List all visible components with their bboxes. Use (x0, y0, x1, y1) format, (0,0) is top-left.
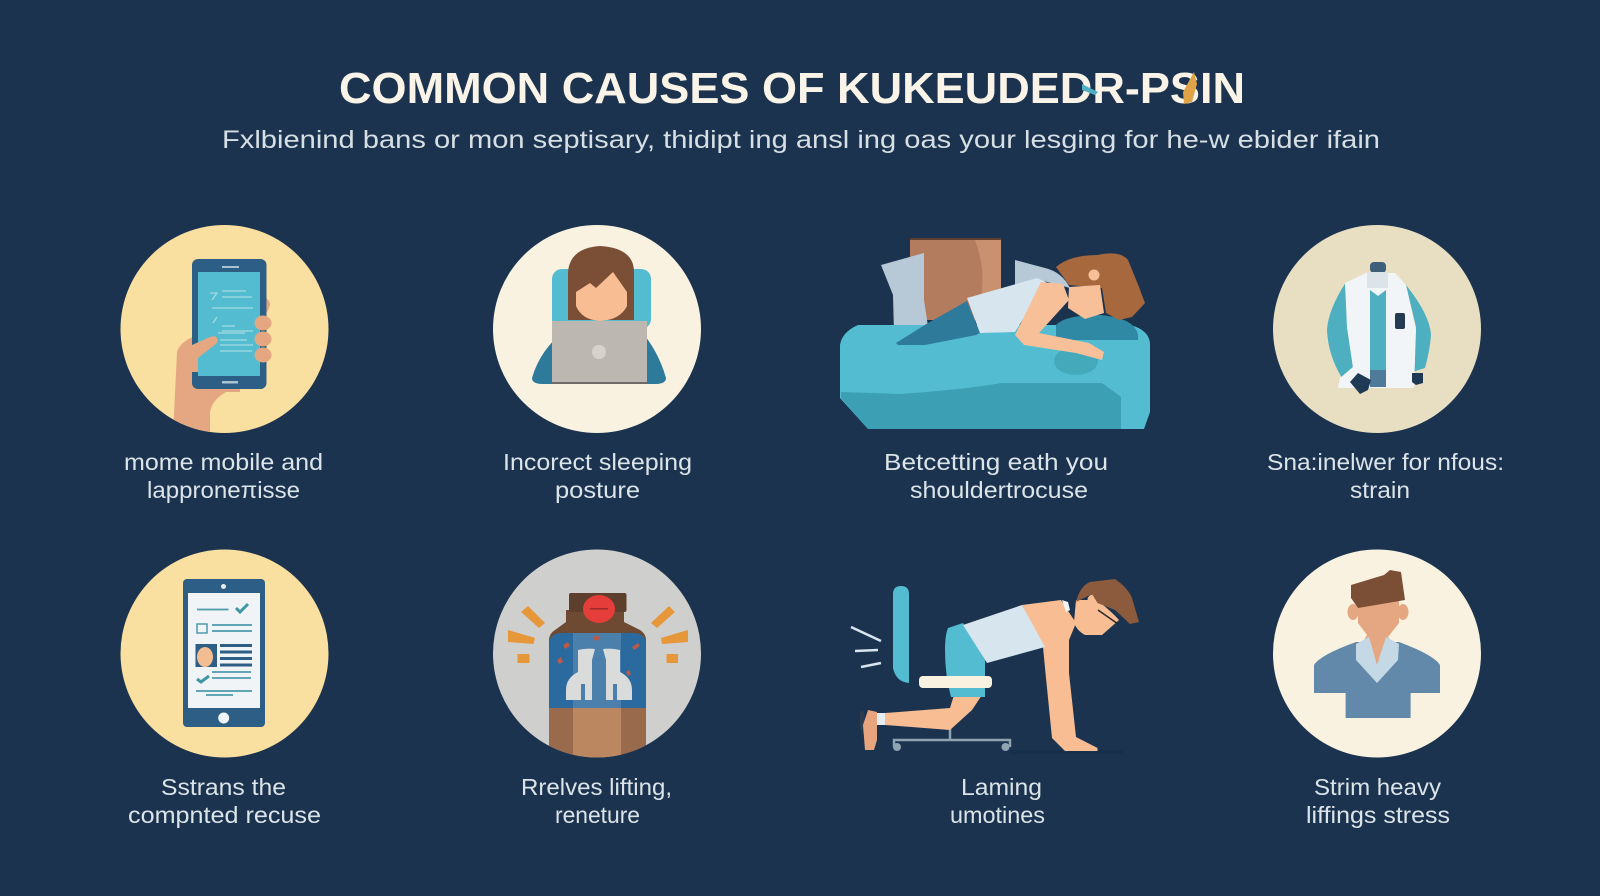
label: umotines (950, 802, 1045, 828)
label: liffings stress (1306, 802, 1450, 828)
panel: phone use (120, 225, 328, 503)
panel: lifting (493, 550, 701, 828)
label (503, 449, 692, 503)
panel: tablet use (120, 550, 328, 828)
label: Sna:inelwer for nfous: (1267, 449, 1504, 475)
label: Sstrans the (161, 774, 286, 800)
icon: tablet with checklist (120, 550, 328, 758)
label (124, 449, 323, 503)
label: Incorect sleeping (503, 449, 692, 475)
label: Betcetting eath you (884, 449, 1108, 475)
label (1306, 774, 1450, 828)
label: posture (555, 477, 640, 503)
label (1267, 449, 1504, 503)
icon: hand holding phone (120, 225, 328, 435)
label: Strim heavy (1314, 774, 1442, 800)
label (521, 774, 672, 828)
panel: jacket strain (1267, 225, 1504, 503)
label: lapproneπisse (147, 477, 300, 503)
label: strain (1350, 477, 1410, 503)
icon: person at laptop (493, 225, 701, 433)
label: compnted recuse (128, 802, 321, 828)
label: shouldertrocuse (910, 477, 1088, 503)
panel: sleeping posture (493, 225, 701, 503)
panel: leaning forward (851, 579, 1139, 828)
icon: person lying on bed (840, 238, 1150, 429)
title: COMMON CAUSES OF KUKEUDEDR-PSIN (339, 64, 1245, 113)
label (884, 449, 1108, 503)
panel: heavy lifting stress (1273, 550, 1481, 828)
label (128, 774, 321, 828)
label: reneture (555, 802, 640, 828)
icon: man portrait (1273, 550, 1481, 758)
icon: bottle with rays (493, 550, 701, 760)
panel: sleeping on bed (840, 238, 1150, 503)
icon: person bent over on chair (851, 579, 1139, 752)
label (950, 774, 1045, 828)
label: mome mobile and (124, 449, 323, 475)
label: Rrelves lifting, (521, 774, 672, 800)
icon: jacket (1273, 225, 1481, 433)
label: Laming (961, 774, 1042, 800)
subtitle: Fxlbienind bans or mon septisary, thidipt ing ansl ing oas your lesging for he-w ebider ifain (222, 126, 1380, 154)
